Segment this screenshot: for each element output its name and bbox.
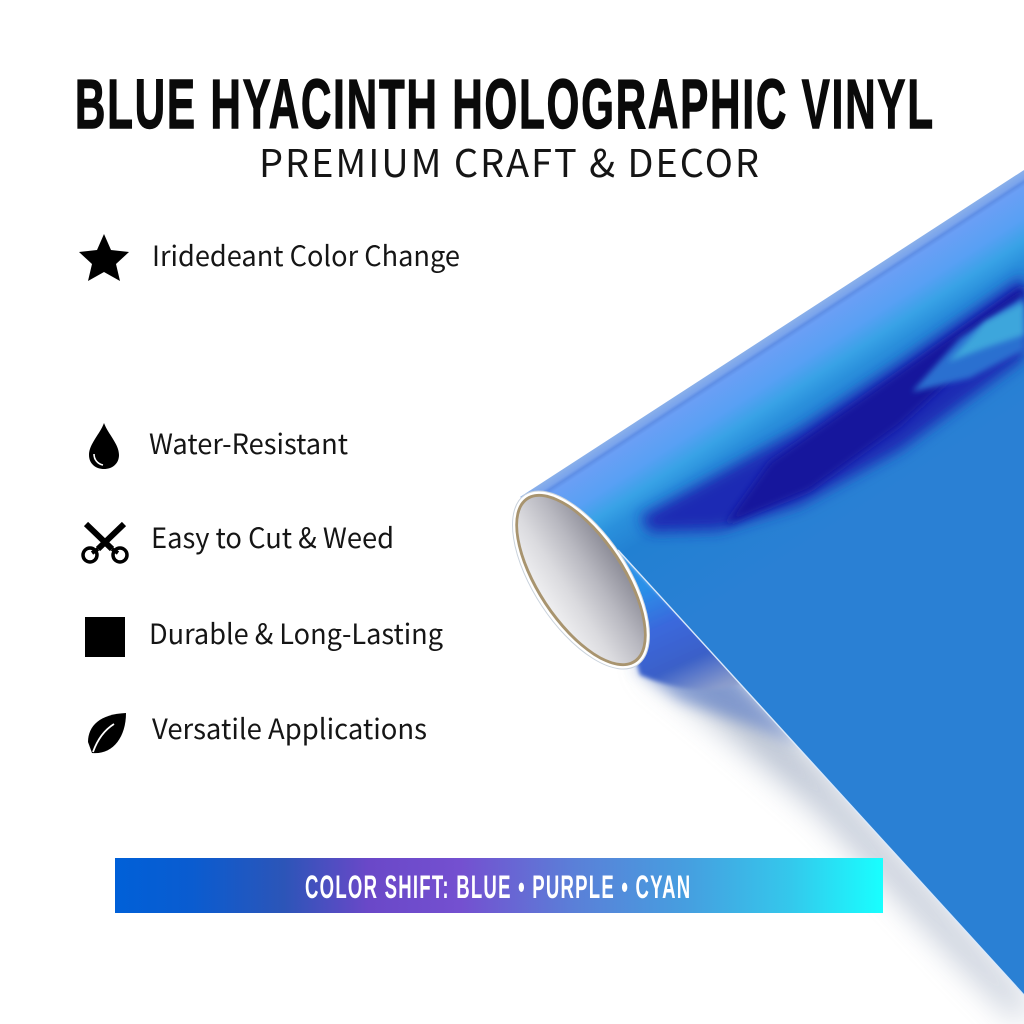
- dark reflection core: [725, 285, 1024, 525]
- shadow beneath the sheet: [640, 660, 1024, 1024]
- highlight on reflection band: [912, 296, 1024, 392]
- label: iridescent: Iridedeant Color Change: [152, 235, 460, 275]
- icon: leaf: [88, 713, 126, 753]
- subtitle: PREMIUM CRAFT & DECOR: [259, 133, 759, 188]
- outer white rim: [486, 469, 676, 691]
- color shift banner: [115, 858, 883, 913]
- feature: iridescent: [79, 234, 460, 281]
- vinyl roll product image: [486, 150, 1024, 1024]
- bright highlight: [948, 302, 1024, 362]
- banner text: COLOR SHIFT: BLUE • PURPLE • CYAN: [305, 869, 690, 905]
- title: BLUE HYACINTH HOLOGRAPHIC VINYL: [75, 66, 933, 144]
- feature: easy to cut: [83, 517, 394, 562]
- label: easy to cut: Easy to Cut & Weed: [151, 517, 394, 557]
- roll end: [486, 469, 676, 691]
- feature: water-resistant: [89, 423, 348, 469]
- feature: versatile: [88, 708, 427, 753]
- blue shadow under the roll: [630, 665, 800, 745]
- label: versatile: Versatile Applications: [152, 708, 427, 748]
- cardboard edge: [490, 473, 672, 687]
- banner gradient bar: [115, 858, 883, 913]
- white sheet edge line: [618, 550, 1024, 995]
- label: water-resistant: Water-Resistant: [149, 423, 348, 463]
- label: durable: Durable & Long-Lasting: [149, 613, 443, 653]
- icon: star: [79, 234, 129, 281]
- icon: water drop: [89, 423, 119, 469]
- dark underside of the roll: [618, 550, 745, 690]
- feature list: [79, 234, 460, 753]
- icon: scissors: [83, 524, 127, 562]
- feature: durable: [85, 613, 443, 657]
- dark reflection band: [640, 275, 1024, 532]
- sheet body: [500, 150, 1024, 1010]
- inner tube: [494, 477, 668, 683]
- icon: square: [85, 617, 125, 657]
